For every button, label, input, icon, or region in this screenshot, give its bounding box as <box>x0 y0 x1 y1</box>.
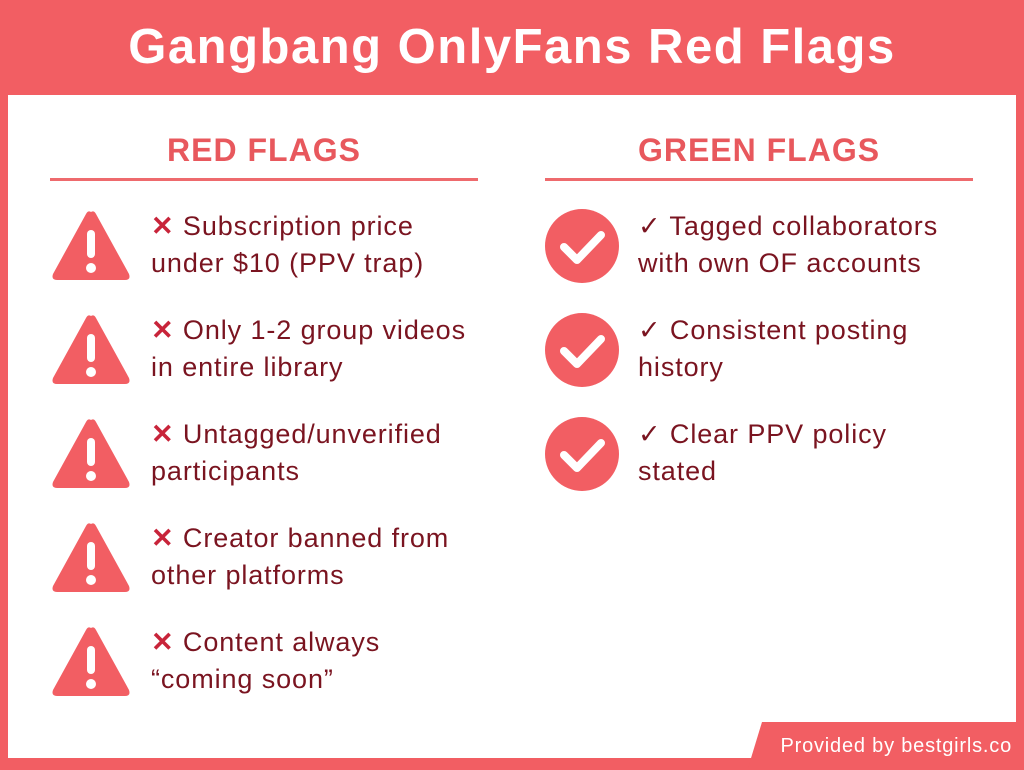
icon: warning <box>52 523 130 592</box>
footer credit: Provided by bestgirls.co <box>780 735 1012 757</box>
icon: check circle <box>545 313 619 387</box>
red flag 2: ✕ Only 1-2 group videos <box>151 315 466 345</box>
green flag 2 <box>545 313 908 387</box>
red flag 5: ✕ Content always <box>151 627 380 657</box>
green flag 1: with own OF accounts <box>638 248 922 278</box>
icon: check circle <box>545 417 619 491</box>
red flag 4 <box>52 523 449 592</box>
heading: red flags: RED FLAGS <box>167 132 361 168</box>
icon: warning <box>52 315 130 384</box>
footer credit <box>751 722 1016 758</box>
red flag 2: in entire library <box>151 352 343 382</box>
green flag 2: ✓ Consistent posting <box>638 315 908 345</box>
green flag 1 <box>545 209 938 283</box>
red flag 1 <box>52 211 424 280</box>
green flag 1: ✓ Tagged collaborators <box>638 211 938 241</box>
red flag 4: ✕ Creator banned from <box>151 523 449 553</box>
red flag 1: under $10 (PPV trap) <box>151 248 424 278</box>
red flag 5 <box>52 627 380 696</box>
icon: warning <box>52 211 130 280</box>
red flag 1: ✕ Subscription price <box>151 211 414 241</box>
heading: green flags: GREEN FLAGS <box>638 132 880 168</box>
icon: warning <box>52 419 130 488</box>
green flag 3: stated <box>638 456 717 486</box>
red flag 4: other platforms <box>151 560 345 590</box>
green flag 3 <box>545 417 887 491</box>
red flag 5: “coming soon” <box>151 664 334 694</box>
green flag 2: history <box>638 352 724 382</box>
icon: check circle <box>545 209 619 283</box>
icon: warning <box>52 627 130 696</box>
red flag 2 <box>52 315 466 384</box>
red flag 3 <box>52 419 442 488</box>
green flag 3: ✓ Clear PPV policy <box>638 419 887 449</box>
title: Gangbang OnlyFans Red Flags <box>128 20 896 74</box>
red flag 3: ✕ Untagged/unverified <box>151 419 442 449</box>
red flag 3: participants <box>151 456 300 486</box>
